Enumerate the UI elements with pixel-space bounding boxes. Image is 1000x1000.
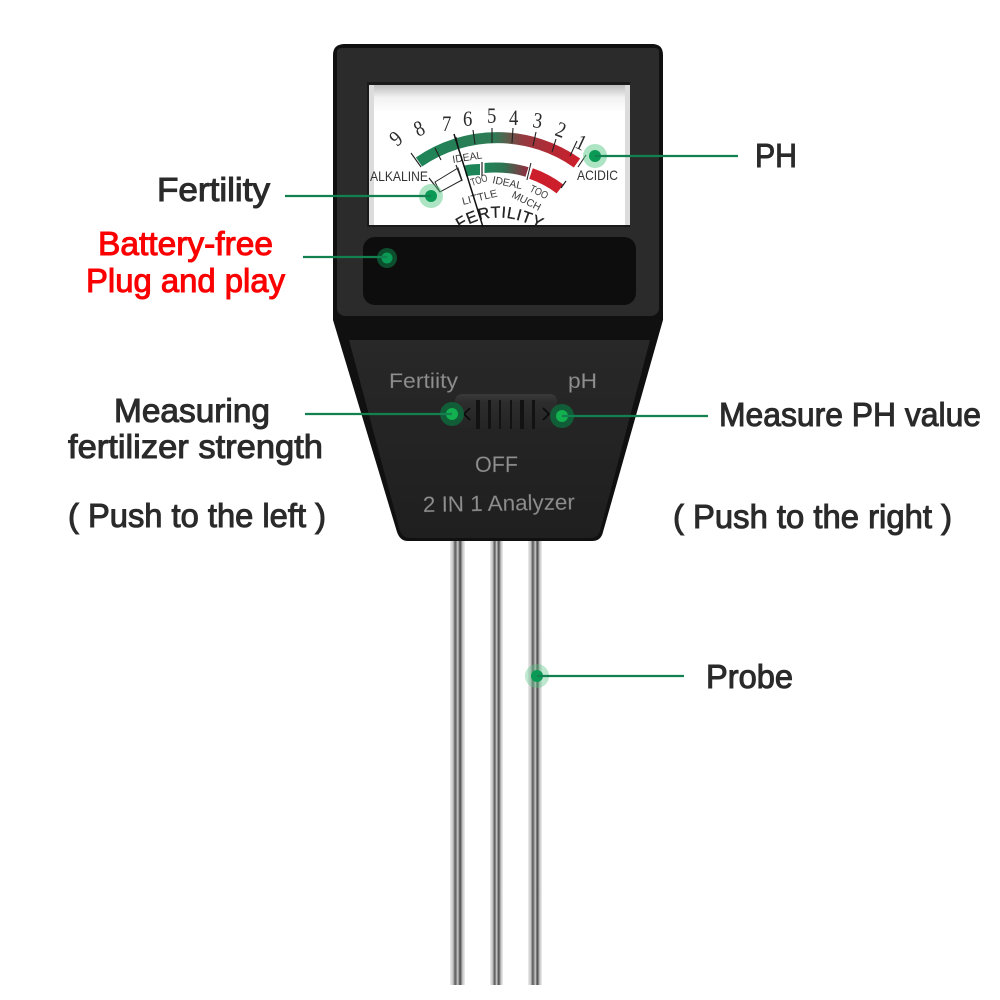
pH numbers: 5 — [487, 105, 496, 128]
lower panel — [349, 340, 650, 538]
callout: Battery-free: Plug and play — [86, 262, 285, 299]
meter window — [367, 82, 630, 227]
callout: Fertility: Fertility — [157, 171, 271, 208]
embossed labels: Fertiity — [389, 370, 459, 393]
embossed labels — [389, 370, 597, 517]
pH numbers — [385, 105, 590, 156]
pH scale band — [411, 128, 586, 167]
pH numbers: 3 — [531, 109, 544, 134]
pH numbers: 2 — [552, 118, 569, 143]
scale labels: IDEAL — [452, 149, 483, 166]
dark panel — [363, 237, 636, 305]
callout: Measuring fertilizer strength: ( Push to the left ) — [68, 497, 326, 534]
callout: Probe — [525, 658, 793, 695]
callout: Measuring fertilizer strength — [68, 392, 464, 534]
pH numbers: 9 — [385, 127, 408, 151]
scale labels — [370, 152, 618, 225]
slide switch — [455, 394, 557, 433]
scale labels: TOO — [469, 172, 489, 189]
pH numbers: 4 — [509, 107, 518, 130]
scale labels: ALKALINE — [370, 168, 428, 184]
meter body — [333, 44, 663, 541]
fertility scale band — [429, 162, 566, 192]
scale labels: ACIDIC — [577, 167, 618, 183]
callout: Measure PH value — [550, 396, 981, 535]
callout: Battery-free: Battery-free — [98, 225, 273, 262]
embossed labels: 2 IN 1 Analyzer — [423, 489, 575, 517]
needle — [454, 134, 483, 227]
callout: Battery-free — [86, 225, 397, 299]
callout: Measure PH value: ( Push to the right ) — [673, 498, 952, 535]
callout: Fertility — [157, 171, 443, 208]
pH numbers: 1 — [572, 130, 590, 156]
probes — [450, 538, 542, 985]
scale labels: IDEAL — [491, 174, 523, 192]
callout: PH — [583, 137, 797, 174]
pH numbers: 7 — [442, 113, 451, 136]
callout: PH: PH — [755, 137, 797, 174]
callout: Measure PH value: Measure PH value — [719, 396, 981, 433]
callout: Probe: Probe — [706, 658, 793, 695]
scale labels: MUCH — [510, 189, 543, 214]
scale labels: TOO — [528, 183, 550, 202]
embossed labels: pH — [568, 370, 597, 393]
pH numbers: 8 — [410, 116, 429, 142]
scale labels: LITTLE — [461, 188, 499, 208]
embossed labels: OFF — [475, 452, 518, 477]
callout: Measuring fertilizer strength: Measuring — [114, 392, 270, 429]
callout: Measuring fertilizer strength: fertilizer strength — [68, 428, 323, 465]
pH numbers: 6 — [463, 108, 472, 131]
scale labels: FERTILITY — [455, 206, 544, 225]
